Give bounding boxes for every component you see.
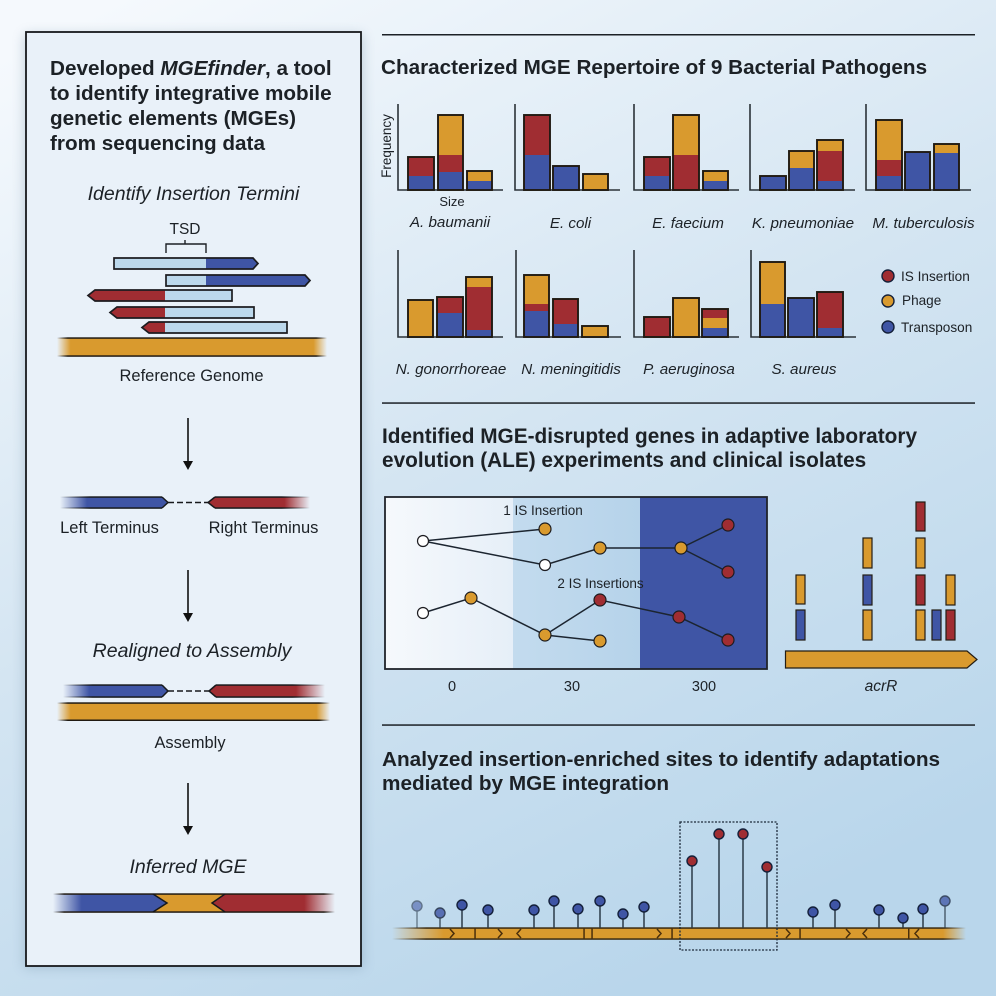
- step heading: realigned to assembly: Realigned to Assembly: [93, 640, 293, 662]
- chart: M. tuberculosis: [866, 104, 975, 232]
- arrow: [183, 418, 193, 470]
- chart: E. faecium: E. faecium: [652, 215, 724, 232]
- chart: ALE lineage tree: [385, 497, 767, 669]
- time axis labels: 0: [448, 679, 456, 695]
- left and right termini: [60, 496, 310, 509]
- chart: A. baumanii: Frequency: [379, 114, 394, 178]
- TSD bracket: [166, 221, 206, 253]
- time axis labels: 300: [692, 679, 716, 695]
- heading: developed MGEfinder: Developed MGEfinder, a tool: [50, 57, 332, 80]
- chart: ALE lineage tree: 2 IS Insertions: [557, 576, 644, 591]
- heading: MGE-disrupted genes: Identified MGE-disrupted genes in adaptive laboratory: [382, 425, 917, 448]
- step heading: inferred MGE: Inferred MGE: [129, 856, 248, 878]
- sequencing reads: [88, 258, 310, 333]
- insertion tiles on acrR: acrR: [865, 678, 897, 695]
- chart: E. coli: [515, 104, 620, 232]
- TSD bracket: TSD: [170, 221, 200, 238]
- inferred MGE bar: [53, 893, 335, 913]
- heading: MGE-disrupted genes: evolution (ALE) experiments and clinical isolates: [382, 449, 866, 472]
- legend: [882, 269, 972, 335]
- chart: K. pneumoniae: K. pneumoniae: [752, 215, 854, 232]
- chart: N. gonorrhoreae: N. gonorrhoreae: [396, 361, 506, 378]
- heading: developed MGEfinder: to identify integrative mobile: [50, 82, 332, 105]
- legend: IS Insertion: [901, 269, 970, 284]
- chart: S. aureus: S. aureus: [771, 361, 837, 378]
- label: left terminus: Left Terminus: [60, 519, 159, 537]
- arrow: [183, 570, 193, 622]
- chart: N. meningitidis: N. meningitidis: [521, 361, 621, 378]
- chart: P. aeruginosa: [634, 250, 739, 378]
- chart: A. baumanii: A. baumanii: [409, 214, 491, 231]
- chart: S. aureus: [751, 250, 856, 378]
- label: right terminus: Right Terminus: [209, 519, 318, 537]
- insertion tiles on acrR: [786, 502, 977, 695]
- chart: A. baumanii: [379, 104, 503, 231]
- arrow: [183, 783, 193, 835]
- chart: E. faecium: [634, 104, 739, 232]
- legend: Transposon: [901, 320, 972, 335]
- chart: N. gonorrhoreae: [396, 250, 506, 378]
- heading: MGE repertoire: Characterized MGE Repertoire of 9 Bacterial Pathogens: [381, 56, 927, 79]
- panel: MGEfinder workflow: [26, 32, 361, 966]
- chart: P. aeruginosa: P. aeruginosa: [643, 361, 735, 378]
- label: assembly: Assembly: [154, 734, 226, 752]
- time axis labels: 30: [564, 679, 580, 695]
- label: reference genome: Reference Genome: [120, 367, 264, 385]
- heading: developed MGEfinder: genetic elements (MGEs): [50, 107, 296, 130]
- chart: K. pneumoniae: [750, 104, 855, 232]
- chart: A. baumanii: Size: [439, 194, 465, 209]
- heading: developed MGEfinder: from sequencing data: [50, 132, 265, 155]
- chart: insertion lollipops on genome: [392, 822, 966, 950]
- termini aligned to assembly: [57, 684, 330, 721]
- heading: insertion-enriched sites: Analyzed insertion-enriched sites to identify adaptations: [382, 748, 940, 771]
- chart: ALE lineage tree: 1 IS Insertion: [503, 503, 583, 518]
- heading: insertion-enriched sites: mediated by MGE integration: [382, 772, 669, 795]
- chart: M. tuberculosis: M. tuberculosis: [872, 215, 975, 232]
- time axis labels: [448, 679, 716, 695]
- chart: N. meningitidis: [516, 250, 621, 378]
- reference genome bar: [57, 337, 327, 357]
- legend: Phage: [902, 293, 941, 308]
- chart: E. coli: E. coli: [550, 215, 592, 232]
- step heading: identify insertion termini: Identify Insertion Termini: [88, 183, 300, 205]
